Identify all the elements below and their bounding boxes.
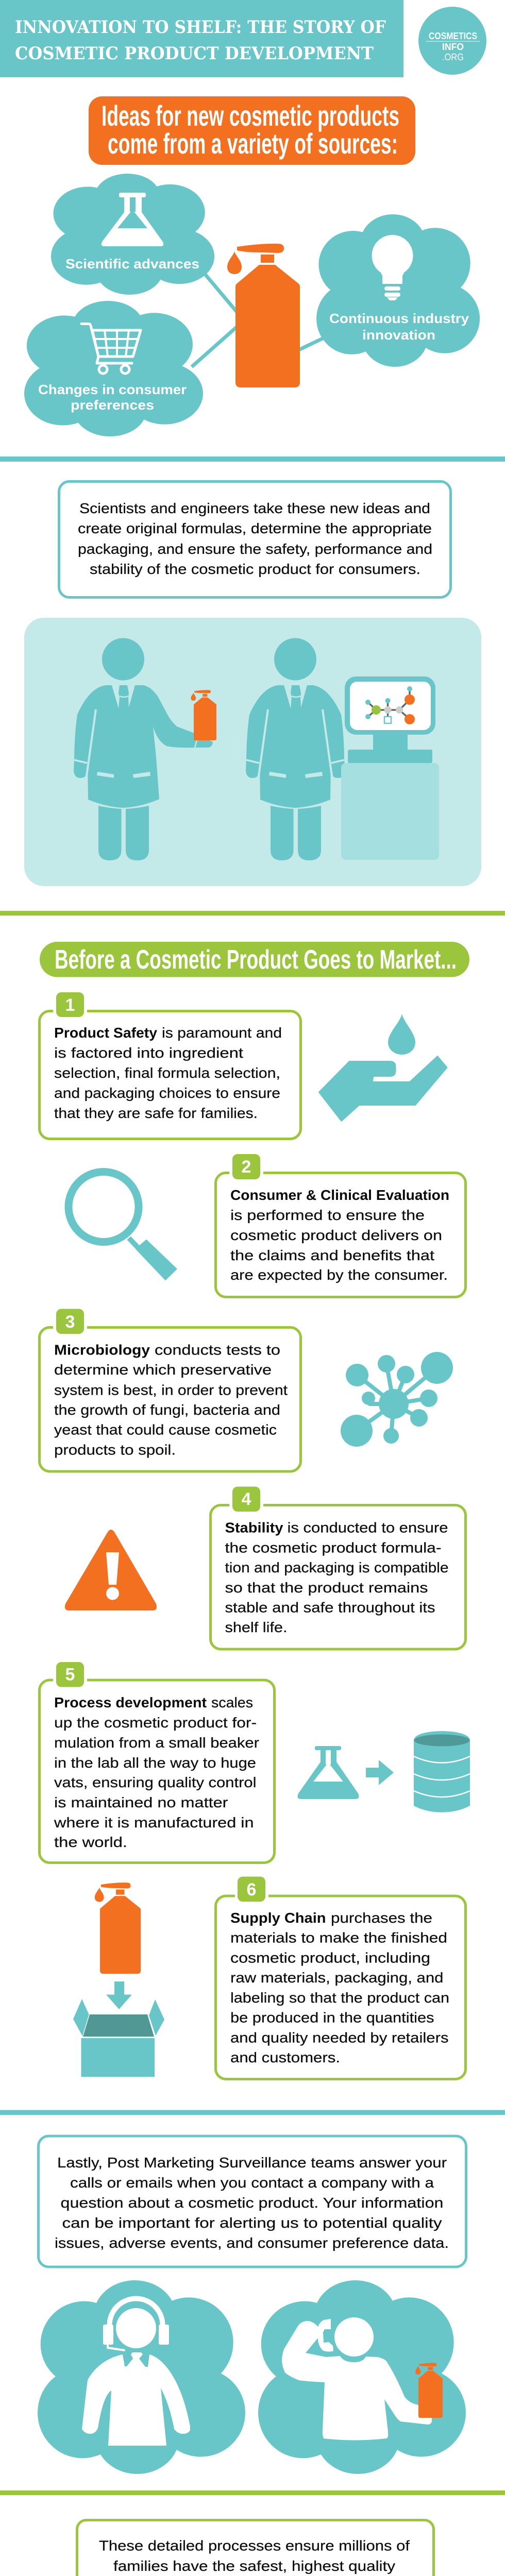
step 1 product safety: Product Safety — [54, 1025, 157, 1041]
consumer on phone — [282, 2317, 432, 2440]
badge 1 — [56, 992, 84, 1017]
step 6 supply chain: labeling so that the product can — [230, 1990, 449, 2006]
step 5 process development: Process development — [54, 1694, 207, 1710]
text box: post marketing surveillance: can be important for alerting us to potential quality — [62, 2215, 442, 2231]
step 6 supply chain: purchases the — [331, 1910, 432, 1926]
text box: post marketing surveillance: question about a cosmetic product. Your information — [61, 2195, 443, 2211]
step 5 process development: up the cosmetic product for- — [54, 1715, 257, 1731]
text box: scientists and engineers: stability of the cosmetic product for consumers. — [90, 561, 420, 577]
step 4 stability: is conducted to ensure — [288, 1520, 448, 1535]
text box: scientists and engineers — [59, 481, 450, 598]
logo top: INFO — [442, 42, 464, 52]
step 1 product safety: is factored into ingredient — [54, 1045, 243, 1061]
badge 6: 6 — [247, 1880, 256, 1900]
step 3 microbiology: yeast that could cause cosmetic — [54, 1422, 277, 1437]
step 4 stability: stable and safe throughout its — [225, 1599, 435, 1616]
cloud: scientific advances — [51, 174, 214, 295]
badge 2: 2 — [242, 1157, 251, 1177]
logo top — [418, 7, 486, 75]
step 4 stability: the cosmetic product formula- — [225, 1539, 441, 1556]
step 6 supply chain: raw materials, packaging, and — [230, 1970, 443, 1986]
step 6 supply chain: and quality needed by retailers — [230, 2030, 448, 2045]
step 3 microbiology: system is best, in order to prevent — [54, 1382, 288, 1398]
step 2 consumer and clinical evaluation — [215, 1154, 466, 1297]
badge 5: 5 — [65, 1665, 75, 1685]
badge 6 — [238, 1876, 265, 1902]
step 6 supply chain: materials to make the finished — [230, 1930, 447, 1945]
step 5 process development — [39, 1662, 274, 1863]
icon: bottle into box — [73, 1883, 164, 2077]
icon: flask — [102, 193, 163, 246]
step 4 stability: Stability — [225, 1520, 283, 1535]
computer on desk — [341, 676, 439, 860]
step 6 supply chain: be produced in the quantities — [230, 2009, 434, 2026]
step 3 microbiology — [39, 1309, 301, 1471]
text box: scientists and engineers: Scientists and engineers take these new ideas and — [79, 500, 430, 516]
logo top: COSMETICS — [429, 31, 477, 41]
step 1 product safety: is paramount and — [162, 1025, 282, 1041]
cloud: continuous innovation: innovation — [362, 327, 435, 343]
header banner — [0, 0, 403, 77]
molecule on screen — [365, 686, 415, 724]
step 2 consumer and clinical evaluation: are expected by the consumer. — [230, 1267, 448, 1283]
cloud: scientific advances: Scientific advances — [65, 256, 199, 272]
scientist holding bottle — [74, 638, 216, 860]
step 4 stability: tion and packaging is compatible — [225, 1560, 448, 1575]
cloud: consumer preferences: preferences — [71, 397, 154, 413]
step 3 microbiology: conducts tests to — [155, 1342, 280, 1358]
icon: warning triangle — [65, 1530, 157, 1611]
step 5 process development: is maintained no matter — [54, 1794, 228, 1810]
icon: bottle — [415, 2363, 443, 2418]
step 2 consumer and clinical evaluation: cosmetic product delivers on — [230, 1227, 442, 1243]
badge 3: 3 — [65, 1312, 75, 1332]
arrow — [366, 1760, 394, 1785]
step 1 product safety — [39, 992, 301, 1139]
header banner: INNOVATION TO SHELF: THE STORY OF — [15, 17, 386, 38]
icon: product bottle — [227, 244, 300, 387]
cloud: continuous innovation — [316, 214, 480, 367]
agent with headset — [82, 2299, 190, 2446]
step 4 stability: shelf life. — [225, 1619, 288, 1635]
step 6 supply chain: Supply Chain — [230, 1910, 326, 1926]
step 3 microbiology: Microbiology — [54, 1342, 150, 1358]
step 5 process development: scales — [211, 1694, 253, 1710]
cloud: consumer preferences — [24, 301, 203, 436]
badge 1: 1 — [65, 995, 75, 1015]
header banner: COSMETIC PRODUCT DEVELOPMENT — [15, 43, 374, 64]
step 6 supply chain: cosmetic product, including — [230, 1950, 430, 1966]
cloud: call center agent — [38, 2280, 245, 2474]
icon: hand with drop — [319, 1014, 447, 1121]
badge 4 — [232, 1487, 260, 1512]
cloud: consumer preferences: Changes in consumer — [38, 382, 187, 397]
logo top: .ORG — [442, 52, 464, 62]
connector lines — [192, 273, 324, 367]
icon: small bottle — [191, 690, 216, 740]
step 1 product safety: and packaging choices to ensure — [54, 1085, 280, 1101]
step 4 stability: so that the product remains — [225, 1580, 428, 1596]
badge 2 — [232, 1154, 260, 1179]
text box: scientists and engineers: packaging, and ensure the safety, performance and — [78, 541, 432, 557]
step 2 consumer and clinical evaluation: is performed to ensure the — [230, 1207, 425, 1223]
step 5 process development: vats, ensuring quality control — [54, 1774, 257, 1790]
heading: ideas — [89, 96, 415, 165]
step 4 stability — [210, 1487, 466, 1649]
icon: light bulb — [372, 235, 413, 300]
text box: detailed processes: These detailed processes ensure millions of — [99, 2538, 410, 2553]
text box: detailed processes — [77, 2520, 434, 2576]
step 3 microbiology: determine which preservative — [54, 1362, 272, 1378]
step 3 microbiology: the growth of fungi, bacteria and — [54, 1402, 280, 1418]
text box: scientists and engineers: create original formulas, determine the appropriate — [78, 520, 432, 536]
icon: magnifying glass — [69, 1172, 176, 1280]
step 5 process development: in the lab all the way to huge — [54, 1755, 256, 1771]
cloud: consumer calling — [258, 2280, 466, 2474]
step 3 microbiology: products to spoil. — [54, 1442, 176, 1458]
text box: post marketing surveillance: issues, adverse events, and consumer preference data. — [55, 2235, 449, 2251]
text box: post marketing surveillance — [38, 2136, 466, 2267]
step 5 process development: where it is manufactured in — [54, 1815, 254, 1831]
badge 5 — [56, 1662, 84, 1687]
cloud: continuous innovation: Continuous industry — [329, 311, 469, 326]
text box: post marketing surveillance: calls or emails when you contact a company with a — [70, 2175, 434, 2191]
text box: detailed processes: families have the safest, highest quality — [113, 2558, 395, 2574]
scientist at computer — [246, 638, 345, 860]
step 2 consumer and clinical evaluation: Consumer & Clinical Evaluation — [230, 1187, 449, 1203]
flask — [297, 1746, 359, 1799]
badge 4: 4 — [242, 1489, 251, 1509]
step 6 supply chain: and customers. — [230, 2049, 340, 2065]
icon: molecule network — [341, 1352, 453, 1447]
icon: shopping cart — [81, 324, 141, 374]
text box: post marketing surveillance: Lastly, Post Marketing Surveillance teams answer your — [57, 2155, 447, 2171]
step 1 product safety: that they are safe for families. — [54, 1105, 258, 1121]
vat — [414, 1731, 470, 1812]
step 2 consumer and clinical evaluation: the claims and benefits that — [230, 1247, 434, 1263]
step 1 product safety: selection, final formula selection, — [54, 1065, 280, 1081]
panel: scientists illustration — [24, 618, 481, 886]
step 5 process development: mulation from a small beaker — [54, 1735, 259, 1751]
badge 3 — [56, 1309, 84, 1334]
icon: flask to vat — [297, 1731, 470, 1812]
step 5 process development: the world. — [54, 1834, 127, 1850]
step 6 supply chain — [215, 1876, 466, 2079]
